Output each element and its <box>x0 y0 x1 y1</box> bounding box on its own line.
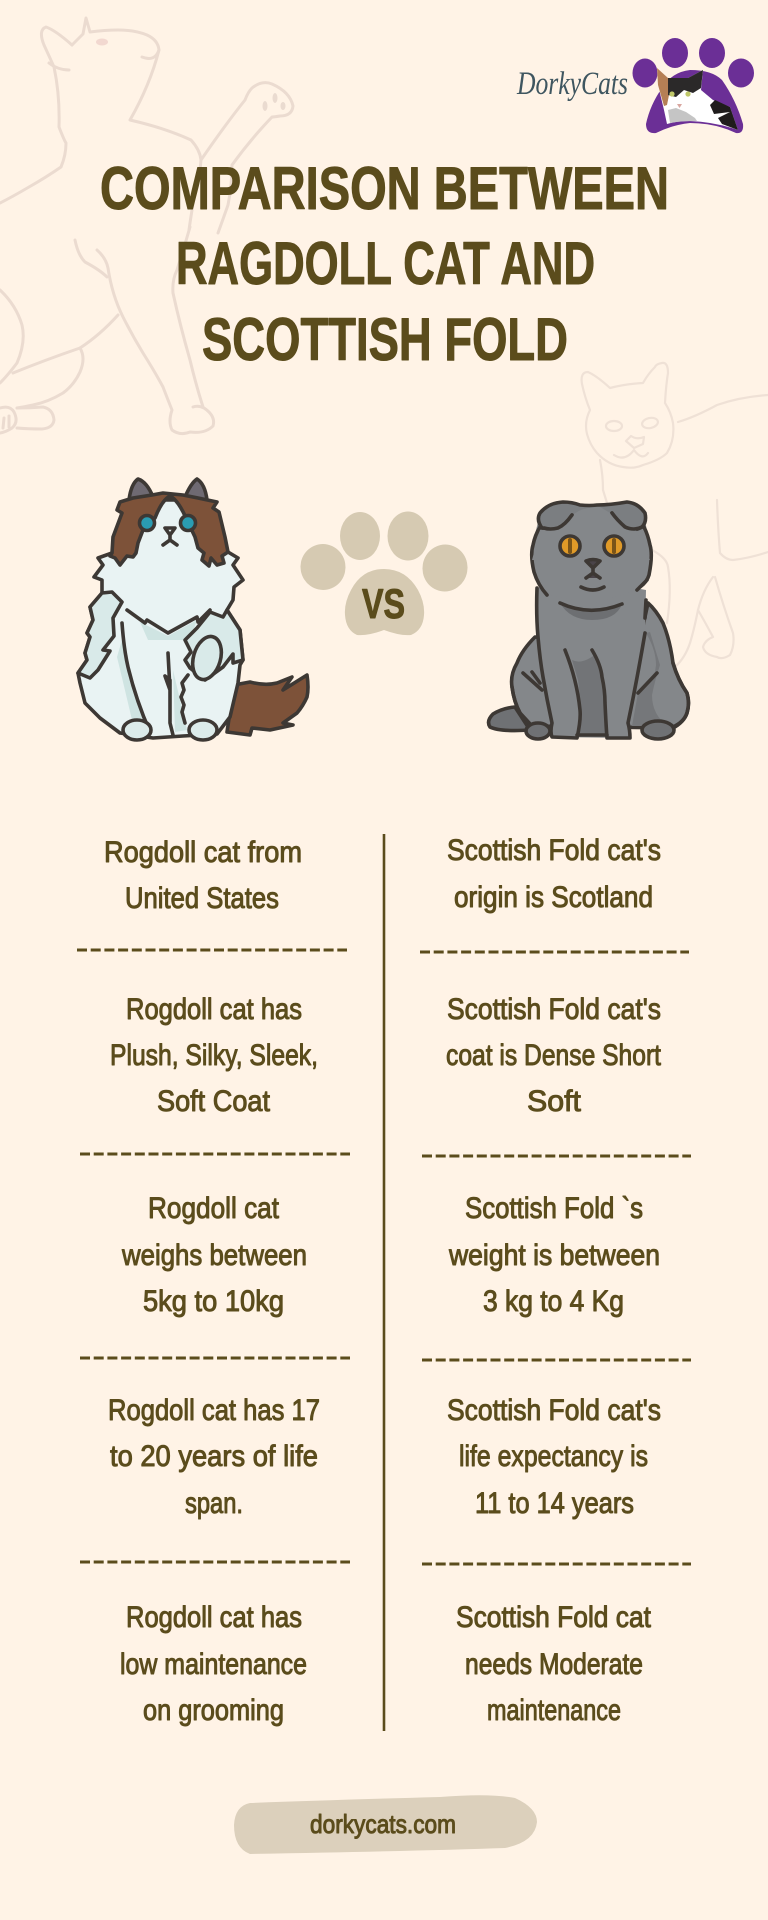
ragdoll left fur <box>78 592 122 678</box>
background outline: standing cat <box>582 363 768 667</box>
fold maintenance: Scottish Fold cat <box>456 1601 652 1634</box>
fold head <box>532 502 651 604</box>
ragdoll body <box>78 500 243 738</box>
ragdoll lifespan: to 20 years of life <box>110 1440 318 1473</box>
ragdoll grooming: low maintenance <box>120 1648 307 1681</box>
fold haunch shade <box>632 632 668 726</box>
fold nose and mouth <box>586 560 600 578</box>
ragdoll lifespan <box>108 1394 320 1520</box>
ragdoll coat: Soft Coat <box>157 1085 271 1118</box>
logo cat photo <box>657 68 738 130</box>
logo wordmark: DorkyCats <box>516 66 628 102</box>
logo paw <box>632 38 754 133</box>
right column: scottish fold facts <box>446 834 662 1727</box>
ragdoll feet <box>123 720 151 740</box>
vs text: VS <box>362 580 405 627</box>
ragdoll tail <box>227 675 308 735</box>
footer website pill <box>234 1795 537 1854</box>
left column: ragdoll facts <box>104 836 320 1727</box>
fold coat: coat is Dense Short <box>446 1039 662 1072</box>
ragdoll nose <box>163 528 177 545</box>
fold torso outlines <box>537 588 580 738</box>
title: SCOTTISH FOLD <box>202 306 568 373</box>
ragdoll weight <box>121 1192 307 1318</box>
fold life expectancy: 11 to 14 years <box>475 1487 634 1520</box>
fold coat <box>446 993 662 1118</box>
ragdoll eyes <box>140 516 154 530</box>
ragdoll head mask <box>110 493 228 566</box>
vs paw badge <box>297 512 471 635</box>
ragdoll weight: weighs between <box>121 1239 307 1272</box>
ragdoll lifespan: span. <box>185 1487 243 1520</box>
fold weight <box>448 1192 660 1318</box>
ragdoll ears <box>129 479 207 500</box>
background outline: stretching cat <box>0 18 293 434</box>
ragdoll chest line <box>127 610 210 633</box>
fold life expectancy: life expectancy is <box>459 1440 648 1473</box>
ragdoll raised paw <box>188 633 226 683</box>
fold coat: Soft <box>527 1085 582 1118</box>
fold folded ears <box>538 502 646 530</box>
ragdoll origin: Rogdoll cat from <box>104 836 302 869</box>
fold tail <box>489 707 530 731</box>
ragdoll weight: Rogdoll cat <box>148 1192 280 1225</box>
illustration: ragdoll cat <box>78 479 308 740</box>
fold belly shade <box>572 655 607 734</box>
title: RAGDOLL CAT AND <box>176 230 595 297</box>
ragdoll grooming: on grooming <box>143 1694 284 1727</box>
centre divider <box>383 834 385 1731</box>
fold chin shadow <box>560 603 622 620</box>
ragdoll shading <box>117 620 197 732</box>
ragdoll coat: Plush, Silky, Sleek, <box>110 1039 318 1072</box>
fold origin: origin is Scotland <box>454 881 653 914</box>
fold maintenance: needs Moderate <box>465 1648 643 1681</box>
fold life expectancy <box>447 1394 661 1520</box>
fold torso <box>537 580 646 738</box>
logo <box>516 38 754 133</box>
ragdoll grooming <box>120 1601 307 1727</box>
fold origin <box>447 834 661 914</box>
fold coat: Scottish Fold cat's <box>447 993 661 1026</box>
fold feet <box>526 723 550 739</box>
fold origin: Scottish Fold cat's <box>447 834 661 867</box>
fold haunches <box>512 603 688 728</box>
ragdoll lifespan: Rogdoll cat has 17 <box>108 1394 320 1427</box>
illustration: scottish fold cat <box>489 502 688 739</box>
fold weight: weight is between <box>448 1239 660 1272</box>
website address: dorkycats.com <box>310 1809 456 1839</box>
fold life expectancy: Scottish Fold cat's <box>447 1394 661 1427</box>
ragdoll origin: United States <box>125 882 279 915</box>
fold maintenance: maintenance <box>487 1694 621 1727</box>
fold maintenance <box>456 1601 652 1727</box>
title <box>100 155 669 373</box>
fold head outline <box>532 527 651 595</box>
ragdoll right fur <box>185 610 243 680</box>
fold eyes <box>560 536 580 556</box>
ragdoll weight: 5kg to 10kg <box>143 1285 284 1318</box>
ragdoll coat: Rogdoll cat has <box>126 993 302 1026</box>
ragdoll coat <box>110 993 318 1118</box>
fold weight: 3 kg to 4 Kg <box>483 1285 624 1318</box>
ragdoll origin <box>104 836 302 915</box>
fold weight: Scottish Fold `s <box>465 1192 643 1225</box>
ragdoll grooming: Rogdoll cat has <box>126 1601 302 1634</box>
